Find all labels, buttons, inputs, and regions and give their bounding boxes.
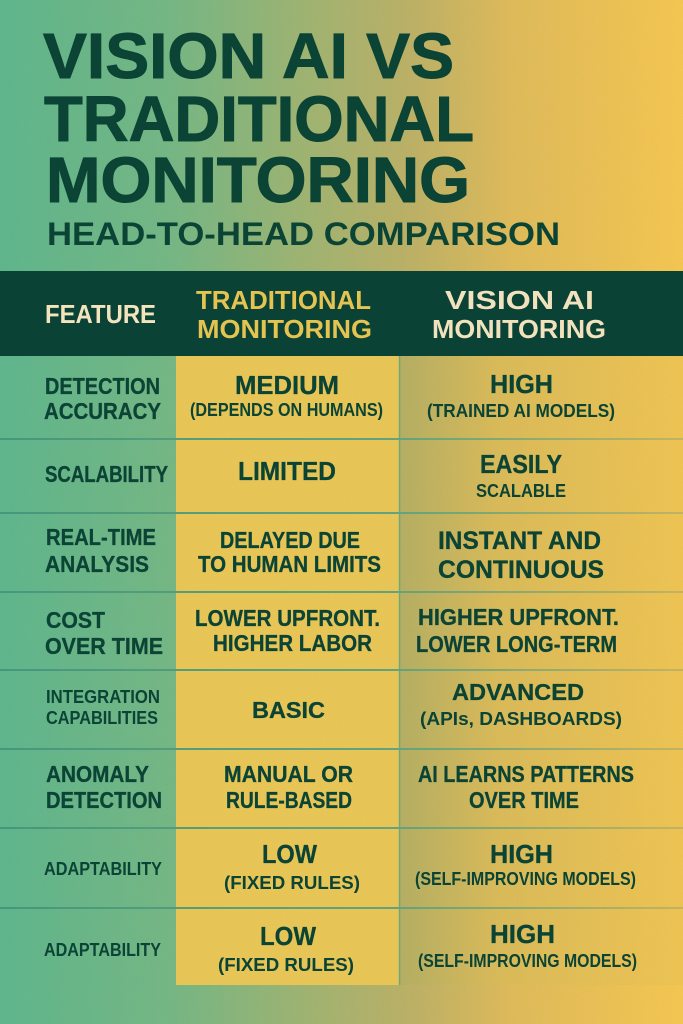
traditional cell: MANUAL OR [224,761,353,787]
feature label: CAPABILITIES [46,708,158,728]
vision cell: (SELF-IMPROVING MODELS) [418,951,637,971]
traditional column fill [176,356,399,985]
vision cell: HIGH [490,369,553,399]
vision cell: OVER TIME [469,787,579,813]
vision cell [476,449,566,501]
vision cell: (TRAINED AI MODELS) [427,401,615,421]
feature label: ANALYSIS [45,551,149,577]
row: detection accuracy [44,369,615,424]
feature label [45,607,163,659]
traditional cell [198,527,381,577]
vision column fill [400,356,683,985]
vision cell: ADVANCED [452,679,584,705]
vision cell [418,761,634,813]
feature label: ADAPTABILITY [44,859,162,879]
header: feature: FEATURE [45,299,156,329]
vision cell: CONTINUOUS [438,556,604,584]
feature label: DETECTION [46,787,162,813]
feature label [46,761,162,813]
subtitle: HEAD-TO-HEAD COMPARISON [47,216,560,252]
traditional cell: LOWER UPFRONT. [195,605,380,631]
traditional cell: TO HUMAN LIMITS [198,551,381,577]
feature label: REAL-TIME [46,524,156,550]
feature label: INTEGRATION [46,687,160,707]
vision cell: EASILY [480,449,562,479]
table header band [0,271,683,356]
feature label: COST [46,607,105,633]
traditional cell: RULE-BASED [226,787,352,813]
traditional cell [190,370,383,420]
header: vision AI monitoring: VISION AI [445,285,594,315]
row: real-time analysis [45,524,604,584]
feature label: ANOMALY [46,761,149,787]
title block: TRADITIONAL [44,83,474,155]
vision cell [415,839,636,889]
row: anomaly detection [46,761,634,813]
header: traditional monitoring [196,285,372,344]
header: traditional monitoring: MONITORING [197,314,372,344]
traditional cell: (FIXED RULES) [224,873,360,893]
traditional cell: DELAYED DUE [220,527,360,553]
feature label: ACCURACY [44,398,161,424]
vision cell: HIGH [490,919,555,949]
feature label: ADAPTABILITY [44,940,161,960]
traditional cell [195,605,380,656]
row: adaptability 2 [44,919,637,975]
traditional cell: LOW [260,921,316,951]
vision cell: AI LEARNS PATTERNS [418,761,634,787]
row dividers [0,438,683,909]
vision cell: INSTANT AND [438,527,601,555]
vision cell [418,919,637,971]
vision cell: (APIs, DASHBOARDS) [420,709,622,729]
header: traditional monitoring: TRADITIONAL [196,285,371,315]
feature label [45,524,156,577]
vision cell: (SELF-IMPROVING MODELS) [415,869,636,889]
vision cell: HIGH [490,839,553,869]
traditional cell: LIMITED [238,456,336,486]
feature label: OVER TIME [45,633,163,659]
vision cell: LOWER LONG-TERM [416,631,617,657]
vision cell [427,369,615,421]
traditional cell [218,921,354,975]
vision cell: HIGHER UPFRONT. [418,604,619,630]
feature label [44,373,161,424]
traditional cell: LOW [262,839,317,869]
feature label: SCALABILITY [45,461,168,487]
traditional cell: HIGHER LABOR [213,630,372,656]
feature label: DETECTION [45,373,160,399]
traditional cell: BASIC [252,697,325,723]
column divider [399,356,400,985]
title block: MONITORING [46,144,470,216]
row: cost over time [45,604,619,659]
row: adaptability 1 [44,839,636,893]
traditional cell [224,839,360,893]
traditional cell [224,761,353,813]
vision cell [420,679,622,729]
vision cell [416,604,619,657]
vision cell: SCALABLE [476,481,566,501]
header: vision AI monitoring [432,285,606,344]
traditional cell: MEDIUM [235,370,339,400]
title block: VISION AI VS [43,20,454,92]
header: vision AI monitoring: MONITORING [432,314,606,344]
row: scalability [45,449,566,501]
title block [43,20,474,216]
traditional cell: (DEPENDS ON HUMANS) [190,400,383,420]
row: integration capabilities [46,679,622,729]
traditional cell: (FIXED RULES) [218,955,354,975]
vision cell [438,527,604,584]
feature label [46,687,160,728]
